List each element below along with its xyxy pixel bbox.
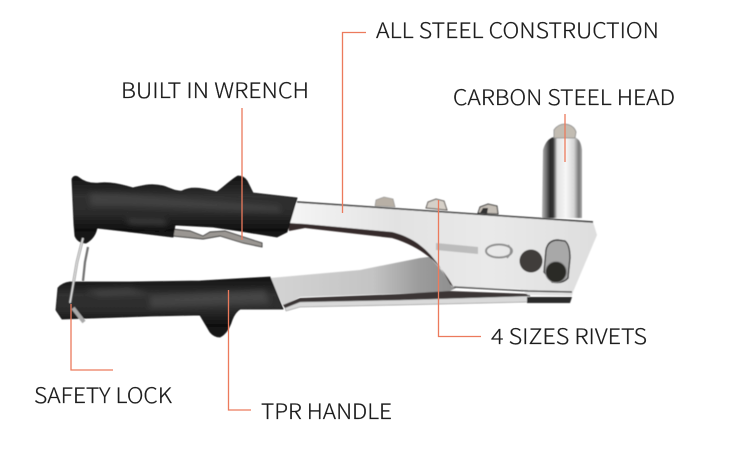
callout: all steel construction: ALL STEEL CONSTRUCTION <box>376 15 659 45</box>
icon: pivot rivets <box>520 240 570 282</box>
callout: all steel construction <box>342 15 659 213</box>
upper black handle <box>72 176 297 243</box>
callout: built in wrench: BUILT IN WRENCH <box>121 75 309 105</box>
lower handle highlights <box>85 288 270 308</box>
icon: carbon steel head <box>542 124 582 218</box>
callout: TPR handle: TPR HANDLE <box>261 396 392 426</box>
callout: safety lock <box>34 304 172 410</box>
lower black handle <box>56 277 283 337</box>
callout: safety lock: SAFETY LOCK <box>34 380 172 410</box>
callout: TPR handle <box>228 290 392 426</box>
icon: rivet nose pieces <box>375 197 498 214</box>
callout: 4 sizes rivets: 4 SIZES RIVETS <box>491 321 647 351</box>
main steel plate <box>288 202 597 296</box>
icon: safety lock clip <box>70 238 88 322</box>
icon: built in wrench <box>172 229 262 247</box>
lower arm <box>270 256 456 306</box>
callout: 4 sizes rivets <box>438 200 647 351</box>
brand stamp <box>436 243 512 258</box>
callout: carbon steel head: CARBON STEEL HEAD <box>453 82 675 112</box>
upper handle highlights <box>90 193 280 226</box>
rivet tool illustration <box>56 124 597 337</box>
